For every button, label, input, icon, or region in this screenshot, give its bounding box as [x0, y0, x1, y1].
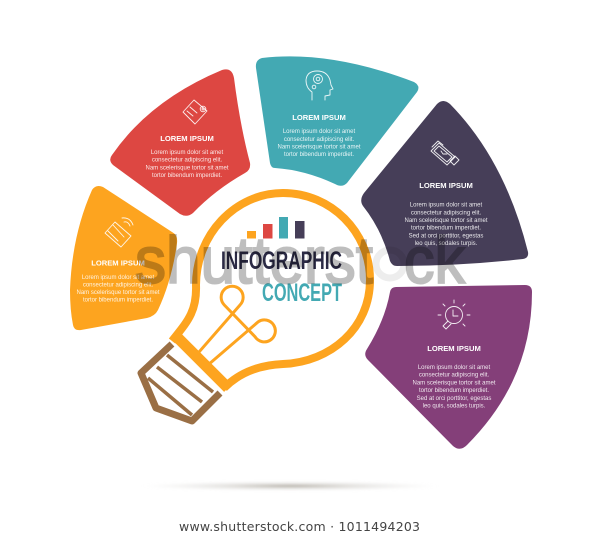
- dark body text: [404, 202, 488, 247]
- purple body text: tortor bibendum imperdiet.: [419, 388, 489, 394]
- orange heading: LOREM IPSUM: [91, 258, 145, 268]
- teal body text: Nam scelerisque tortor sit amet: [277, 144, 361, 150]
- panel: purple: [365, 285, 532, 449]
- red body text: consectetur adipiscing elit.: [152, 158, 223, 164]
- purple body text: leo quis, sodales turpis.: [423, 404, 486, 410]
- purple body text: Nam scelerisque tortor sit amet: [412, 380, 496, 386]
- red heading: LOREM IPSUM: [160, 134, 214, 143]
- bar chart icon: [247, 217, 304, 238]
- bulb filament: [199, 286, 275, 363]
- icon: bulb with clock: [438, 300, 470, 329]
- dark body text: Nam scelerisque tortor sit amet: [404, 218, 488, 224]
- orange body text: Lorem ipsum dolor sit amet: [82, 275, 155, 281]
- panel: red: [110, 69, 250, 216]
- teal body text: consectetur adipiscing elit.: [284, 137, 355, 143]
- title: infographic: INFOGRAPHIC: [221, 247, 342, 275]
- watermark: shutterst: [135, 223, 373, 297]
- panel: teal: [256, 56, 418, 186]
- light bulb: [141, 193, 370, 421]
- dark heading: LOREM IPSUM: [419, 181, 473, 190]
- bulb collar: [176, 336, 228, 388]
- icon: smartphone: [105, 218, 133, 247]
- orange body text: tortor bibendum imperdiet.: [83, 298, 153, 304]
- teal body text: tortor bibendum imperdiet.: [284, 152, 354, 158]
- watermark: ck: [404, 223, 466, 297]
- dark body text: leo quis, sodales turpis.: [415, 241, 478, 247]
- purple body text: Lorem ipsum dolor sit amet: [418, 365, 491, 371]
- dark body text: Sed at orci porttitor, egestas: [409, 233, 483, 239]
- icon: document and gear: [183, 100, 207, 124]
- dark body text: Lorem ipsum dolor sit amet: [410, 202, 483, 208]
- orange body text: consectetur adipiscing elit.: [83, 282, 154, 288]
- purple body text: consectetur adipiscing elit.: [419, 373, 490, 379]
- dark body text: consectetur adipiscing elit.: [411, 210, 482, 216]
- red body text: Lorem ipsum dolor sit amet: [151, 150, 224, 156]
- bulb glass outline: [172, 193, 370, 388]
- dark body text: tortor bibendum imperdiet.: [411, 226, 481, 232]
- red body text: tortor bibendum imperdiet.: [152, 173, 222, 179]
- purple body text: [412, 365, 496, 410]
- ground shadow: [140, 481, 440, 491]
- title: concept: CONCEPT: [262, 279, 342, 307]
- teal heading: LOREM IPSUM: [292, 113, 346, 122]
- icon: head with gear: [306, 71, 333, 100]
- red body text: Nam scelerisque tortor sit amet: [145, 166, 229, 172]
- orange body text: [76, 275, 160, 304]
- purple body text: Sed at orci porttitor, egestas: [417, 396, 491, 402]
- panel: orange: [70, 186, 177, 330]
- bulb base: [141, 344, 220, 421]
- panel: dark: [361, 101, 528, 266]
- teal body text: Lorem ipsum dolor sit amet: [283, 129, 356, 135]
- icon: wristwatch: [431, 141, 459, 165]
- footer credit: www.shutterstock.com · 1011494203: [179, 519, 420, 534]
- orange body text: Nam scelerisque tortor sit amet: [76, 290, 160, 296]
- red body text: [145, 150, 229, 179]
- purple heading: LOREM IPSUM: [427, 344, 481, 353]
- teal body text: [277, 129, 361, 158]
